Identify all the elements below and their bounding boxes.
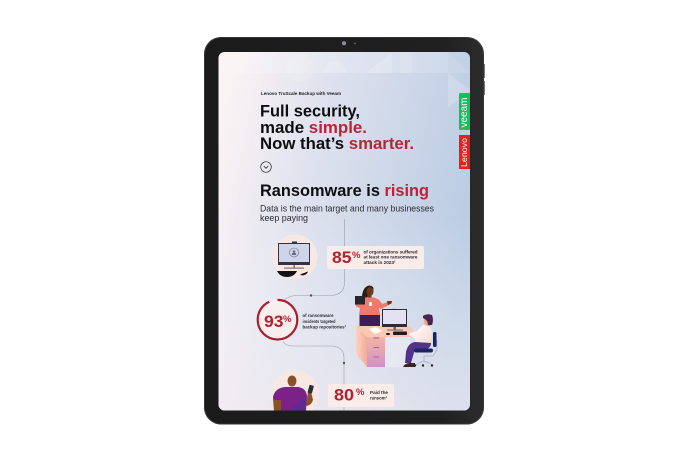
donut stat: 93 percent: 93 — [264, 313, 284, 331]
connector lines — [283, 219, 345, 411]
veeam tab: veeam — [459, 98, 470, 128]
callout: 85 percent: attack in 2023¹ — [364, 260, 396, 265]
donut stat: 93 percent — [258, 300, 346, 340]
donut stat: 93 percent: backup repositories¹ — [302, 324, 346, 330]
donut stat: 93 percent: of ransomware — [302, 313, 334, 318]
icon: chevron down circle — [261, 162, 271, 172]
donut stat: 93 percent: % — [283, 314, 292, 325]
callout: 80 percent — [328, 384, 394, 407]
subheading: Data is the main target and many businesses — [260, 204, 434, 214]
callout: 80 percent: 80 — [334, 386, 354, 404]
subheading: keep paying — [260, 213, 308, 223]
illustration: office workers at desk — [355, 286, 437, 367]
callout: 80 percent: Paid the — [370, 390, 388, 395]
donut stat: 93 percent: incidents targeted — [302, 319, 336, 324]
Lenovo tab: Lenovo — [459, 138, 469, 167]
main heading: Now that’s smarter. — [260, 134, 414, 153]
decorative background shapes — [218, 52, 470, 108]
main heading: Full security, — [260, 102, 360, 120]
illustration: man holding phone — [271, 370, 319, 410]
callout: 85 percent: % — [352, 250, 361, 261]
eyebrow text: Lenovo TruScale Backup with Veeam — [261, 91, 341, 97]
icon: camera — [342, 41, 356, 45]
standing woman — [355, 286, 392, 326]
screen — [218, 52, 470, 418]
callout: 85 percent: 85 — [332, 249, 352, 267]
callout: 85 percent: at least one ransomware — [364, 255, 418, 260]
callout: 80 percent: % — [356, 387, 365, 398]
tablet device — [204, 37, 485, 424]
callout: 80 percent: ransom¹ — [370, 396, 387, 400]
main heading — [261, 104, 413, 149]
section heading: Ransomware is rising — [260, 181, 429, 200]
icon: computer monitor in circle — [272, 234, 318, 280]
subheading — [260, 204, 434, 223]
seated woman — [403, 314, 437, 367]
monitor on desk — [382, 308, 407, 335]
callout: 85 percent — [327, 246, 424, 269]
callout: 85 percent: of organizations suffered — [364, 249, 418, 254]
desk — [356, 326, 418, 367]
main heading: made simple. — [260, 118, 367, 137]
